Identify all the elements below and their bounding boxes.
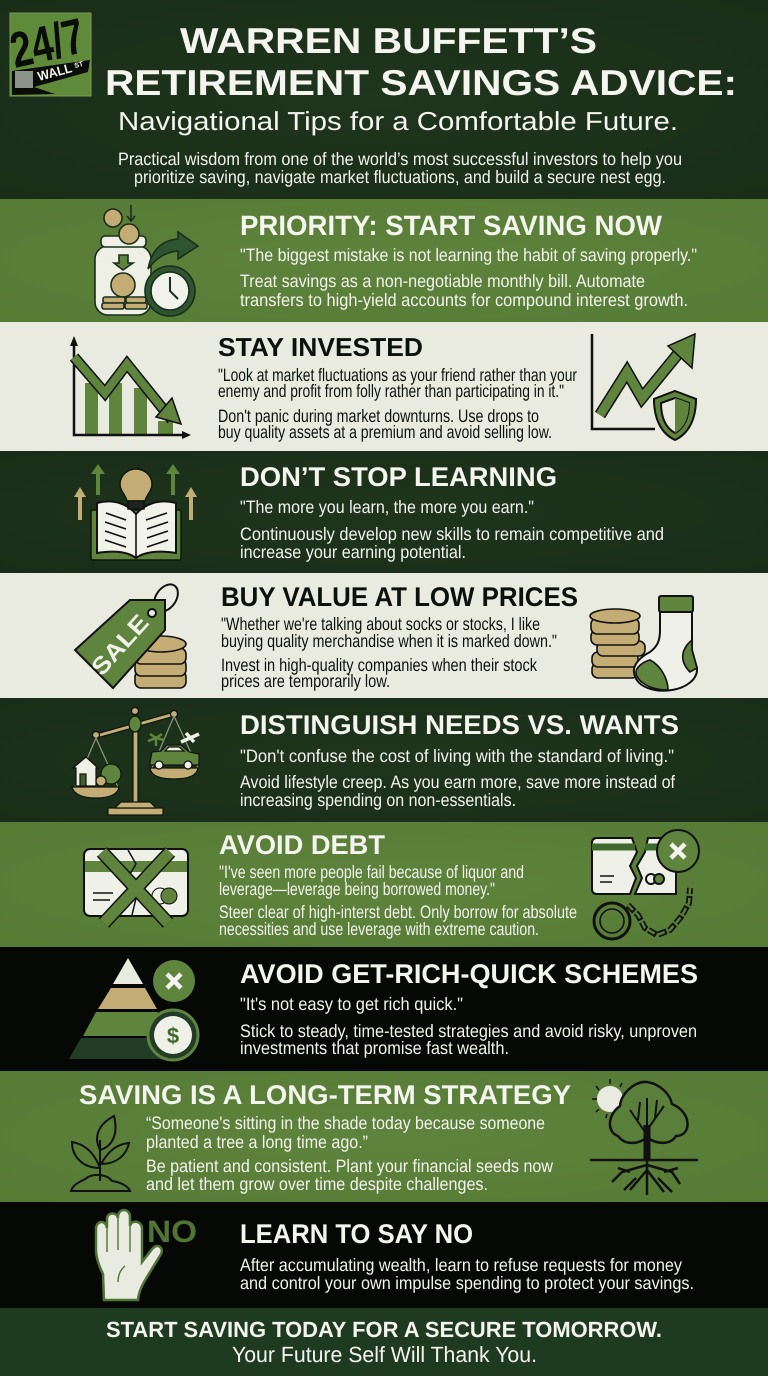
body text: After accumulating wealth, learn to refuse requests for money	[240, 1255, 682, 1275]
quote: "Look at market fluctuations as your friend rather than your	[218, 365, 577, 385]
quote: "The biggest mistake is not learning the habit of saving properly."	[240, 245, 697, 265]
quote: “Someone's sitting in the shade today because someone	[146, 1113, 545, 1133]
icon: book and light bulb	[74, 464, 197, 560]
panel: learn to say no	[0, 1202, 768, 1308]
icon: falling bar chart	[70, 336, 191, 439]
icon: raised hand	[96, 1210, 162, 1300]
quote	[221, 614, 557, 651]
icon label: NO: NO	[147, 1214, 197, 1249]
quote: buying quality merchandise when it is marked down."	[221, 631, 557, 651]
body text	[218, 406, 552, 442]
title: WARREN BUFFETT’S	[180, 20, 597, 61]
heading: DON’T STOP LEARNING	[240, 462, 557, 492]
body text: prices are temporarily low.	[221, 671, 390, 691]
subtitle: Navigational Tips for a Comfortable Future.	[118, 106, 678, 136]
quote: "The more you learn, the more you earn."	[240, 497, 534, 517]
body text: Continuously develop new skills to remain competitive and	[240, 524, 664, 544]
body text: and let them grow over time despite challenges.	[146, 1174, 488, 1194]
intro text	[118, 149, 682, 187]
body text	[219, 902, 577, 939]
body text: buy quality assets at a premium and avoid selling low.	[218, 422, 552, 442]
body text	[240, 772, 676, 810]
icon: rising chart with shield	[592, 334, 696, 440]
icon: tree with sun and roots	[590, 1079, 698, 1195]
body text: Avoid lifestyle creep. As you earn more, save more instead of	[240, 772, 676, 792]
logo: 24/7 Wall St	[5, 8, 91, 96]
body text: Don't panic during market downturns. Use drops to	[218, 406, 539, 426]
body text	[240, 524, 664, 562]
body text: and control your own impulse spending to protect your savings.	[240, 1273, 694, 1293]
heading: PRIORITY: START SAVING NOW	[240, 210, 663, 241]
body text	[240, 271, 688, 310]
panel: avoid get-rich-quick schemes	[0, 947, 768, 1071]
title: RETIREMENT SAVINGS ADVICE:	[105, 62, 737, 103]
body text: investments that promise fast wealth.	[240, 1038, 509, 1058]
panel: stay invested	[0, 322, 768, 451]
quote: "Whether we're talking about socks or stocks, I like	[221, 614, 540, 634]
icon: pyramid with stop sign and clock: $	[167, 1023, 179, 1048]
icon: balance scale	[72, 708, 199, 815]
quote: planted a tree a long time ago.”	[146, 1132, 368, 1152]
logo: 24/7 Wall St: ST	[74, 61, 85, 70]
heading: DISTINGUISH NEEDS VS. WANTS	[240, 710, 679, 740]
panel: avoid debt	[0, 822, 768, 947]
panel: priority start saving now	[0, 199, 768, 322]
body text: transfers to high-yield accounts for compound interest growth.	[240, 290, 688, 310]
quote: "I've seen more people fail because of liquor and	[219, 862, 524, 882]
quote	[218, 365, 577, 401]
icon: pyramid with stop sign and clock	[69, 958, 198, 1060]
heading: STAY INVESTED	[218, 332, 423, 362]
body text: Be patient and consistent. Plant your financial seeds now	[146, 1156, 554, 1176]
body text: Steer clear of high-interst debt. Only borrow for absolute	[219, 902, 577, 922]
body text: Invest in high-quality companies when their stock	[221, 655, 538, 675]
panel: buy value at low prices	[0, 573, 768, 698]
panel: distinguish needs vs wants	[0, 698, 768, 822]
quote	[219, 862, 524, 899]
icon: coins and sock	[590, 596, 697, 691]
logo: 24/7 Wall St: 24/7	[5, 8, 90, 79]
icon: crossed-out credit card	[84, 849, 188, 923]
icon: sale tag and coins	[75, 580, 186, 688]
title	[105, 20, 737, 103]
body text	[240, 1021, 697, 1058]
icon: coin jar and clock	[95, 205, 198, 316]
intro text: Practical wisdom from one of the world’s most successful investors to help you	[118, 149, 682, 169]
body text: increase your earning potential.	[240, 542, 466, 562]
panel: header	[0, 0, 768, 199]
icon: sale tag and coins: SALE	[86, 610, 154, 681]
body text: Stick to steady, time-tested strategies and avoid risky, unproven	[240, 1021, 697, 1041]
quote: "Don't confuse the cost of living with the standard of living."	[240, 746, 674, 766]
heading: AVOID GET-RICH-QUICK SCHEMES	[240, 959, 698, 989]
quote	[146, 1113, 545, 1152]
body text: increasing spending on non-essentials.	[240, 790, 516, 810]
panel: footer	[0, 1308, 768, 1376]
heading: LEARN TO SAY NO	[240, 1219, 473, 1249]
panel: saving is a long-term strategy	[0, 1071, 768, 1202]
body text: Treat savings as a non-negotiable monthly bill. Automate	[240, 271, 645, 291]
quote: enemy and profit from folly rather than participating in it."	[218, 381, 564, 401]
intro text: prioritize saving, navigate market fluctuations, and build a secure nest egg.	[134, 167, 666, 187]
body text	[240, 1255, 694, 1293]
icon: broken card and handcuffs	[592, 830, 699, 939]
heading: AVOID DEBT	[219, 830, 386, 860]
footer tagline: Your Future Self Will Thank You.	[232, 1342, 537, 1367]
body text	[221, 655, 538, 691]
logo: 24/7 Wall St: WALL	[36, 60, 74, 84]
heading: SAVING IS A LONG-TERM STRATEGY	[79, 1080, 571, 1110]
panel: don't stop learning	[0, 451, 768, 573]
icon: sprout	[71, 1116, 130, 1191]
heading: BUY VALUE AT LOW PRICES	[221, 582, 578, 612]
body text	[146, 1156, 554, 1194]
quote: leverage—leverage being borrowed money."	[219, 879, 495, 899]
body text: necessities and use leverage with extreme caution.	[219, 919, 539, 939]
quote: "It's not easy to get rich quick."	[240, 994, 463, 1014]
footer headline: START SAVING TODAY FOR A SECURE TOMORROW.	[106, 1317, 662, 1342]
